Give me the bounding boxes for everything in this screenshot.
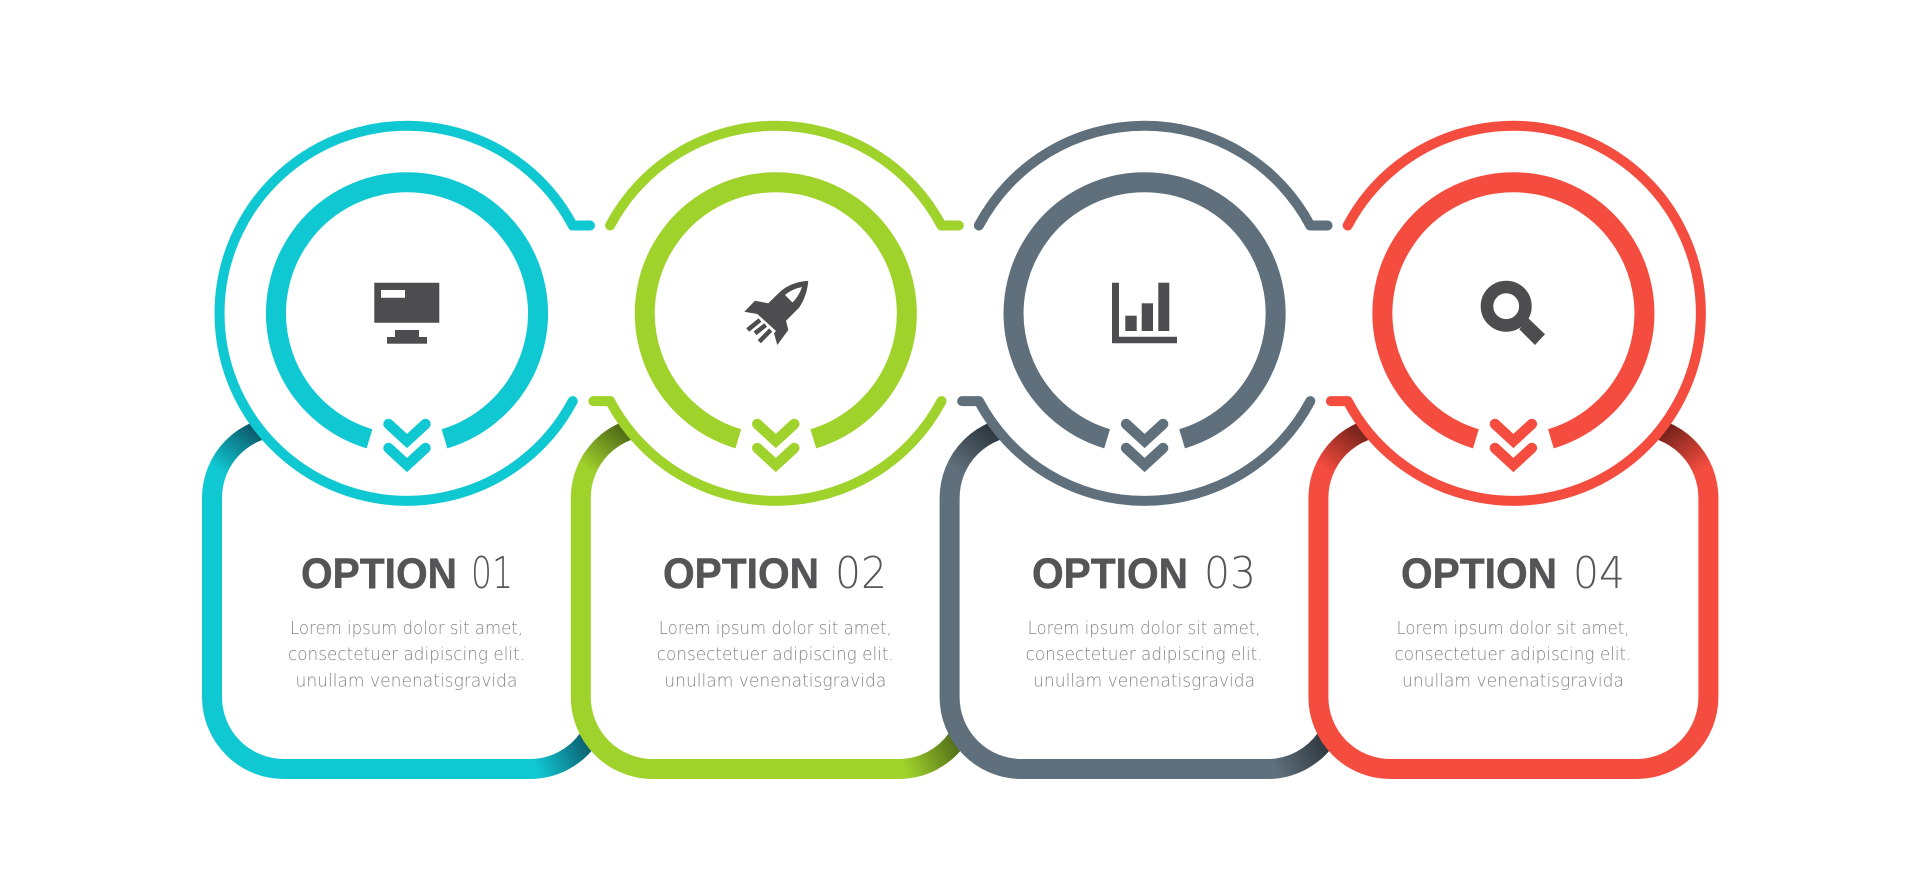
card outline: option 04 — [1318, 426, 1708, 769]
text block: option 03: Lorem ipsum dolor sit amet, — [1028, 618, 1261, 639]
inner ring: option 03 — [1014, 182, 1276, 439]
text block: option 02: Lorem ipsum dolor sit amet, — [659, 618, 892, 639]
inner ring: option 02 — [645, 182, 907, 439]
heading: option 02: 02 — [835, 548, 887, 599]
text block: option 01: consectetuer adipiscing elit. — [288, 644, 525, 665]
inner ring: option 01 — [276, 182, 538, 439]
outer ring bottom: option 03 — [962, 401, 1310, 501]
chevrons: option 04 — [1495, 424, 1532, 465]
text block: option 01 — [288, 618, 525, 692]
text block: option 02: unullam venenatisgravida — [664, 670, 886, 692]
text block: option 04 — [1394, 618, 1632, 692]
circle group: option 01 — [220, 126, 590, 501]
text block: option 04: Lorem ipsum dolor sit amet, — [1396, 618, 1630, 639]
outer ring: option 01 — [220, 126, 590, 501]
icon: magnifier — [1487, 287, 1545, 345]
chevrons: option 01 — [388, 424, 426, 465]
icon: bar chart — [1112, 283, 1177, 343]
card outline: option 02 — [581, 426, 958, 769]
heading: option 02: OPTION — [663, 550, 819, 598]
inner ring: option 04 — [1382, 182, 1644, 439]
heading: option 03 — [1032, 548, 1256, 599]
text block: option 01: unullam venenatisgravida — [296, 670, 518, 692]
outer ring bottom: option 02 — [593, 401, 942, 501]
outer ring: option 04 — [1331, 126, 1701, 501]
chevrons: option 02 — [757, 424, 794, 465]
heading: option 03: OPTION — [1032, 550, 1188, 598]
card outline: option 03 — [950, 426, 1327, 769]
icon: monitor — [374, 283, 439, 344]
chevrons: option 03 — [1126, 424, 1163, 465]
text block: option 01: Lorem ipsum dolor sit amet, — [290, 618, 523, 639]
heading: option 04: 04 — [1573, 548, 1625, 599]
circle group: option 02 — [593, 126, 959, 501]
text block: option 02 — [657, 618, 894, 692]
outer ring top: option 03 — [979, 126, 1328, 226]
heading: option 04 — [1401, 548, 1625, 599]
text block: option 03: unullam venenatisgravida — [1033, 670, 1255, 692]
circle group: option 03 — [962, 126, 1328, 501]
heading: option 02 — [663, 548, 887, 599]
text block: option 03 — [1026, 618, 1263, 692]
outer ring top: option 02 — [610, 126, 959, 226]
text block: option 04: unullam venenatisgravida — [1402, 670, 1624, 692]
text block: option 02: consectetuer adipiscing elit. — [657, 644, 894, 665]
text block: option 04: consectetuer adipiscing elit. — [1394, 644, 1632, 665]
card outline: option 01 — [212, 426, 589, 769]
heading: option 04: OPTION — [1401, 550, 1557, 598]
circle backgrounds — [219, 125, 1701, 501]
heading: option 01: OPTION — [301, 550, 457, 598]
icon: rocket — [744, 281, 808, 345]
heading: option 03: 03 — [1204, 548, 1256, 599]
heading: option 01: 01 — [471, 548, 513, 599]
text block: option 03: consectetuer adipiscing elit. — [1026, 644, 1263, 665]
circle group: option 04 — [1331, 126, 1701, 501]
